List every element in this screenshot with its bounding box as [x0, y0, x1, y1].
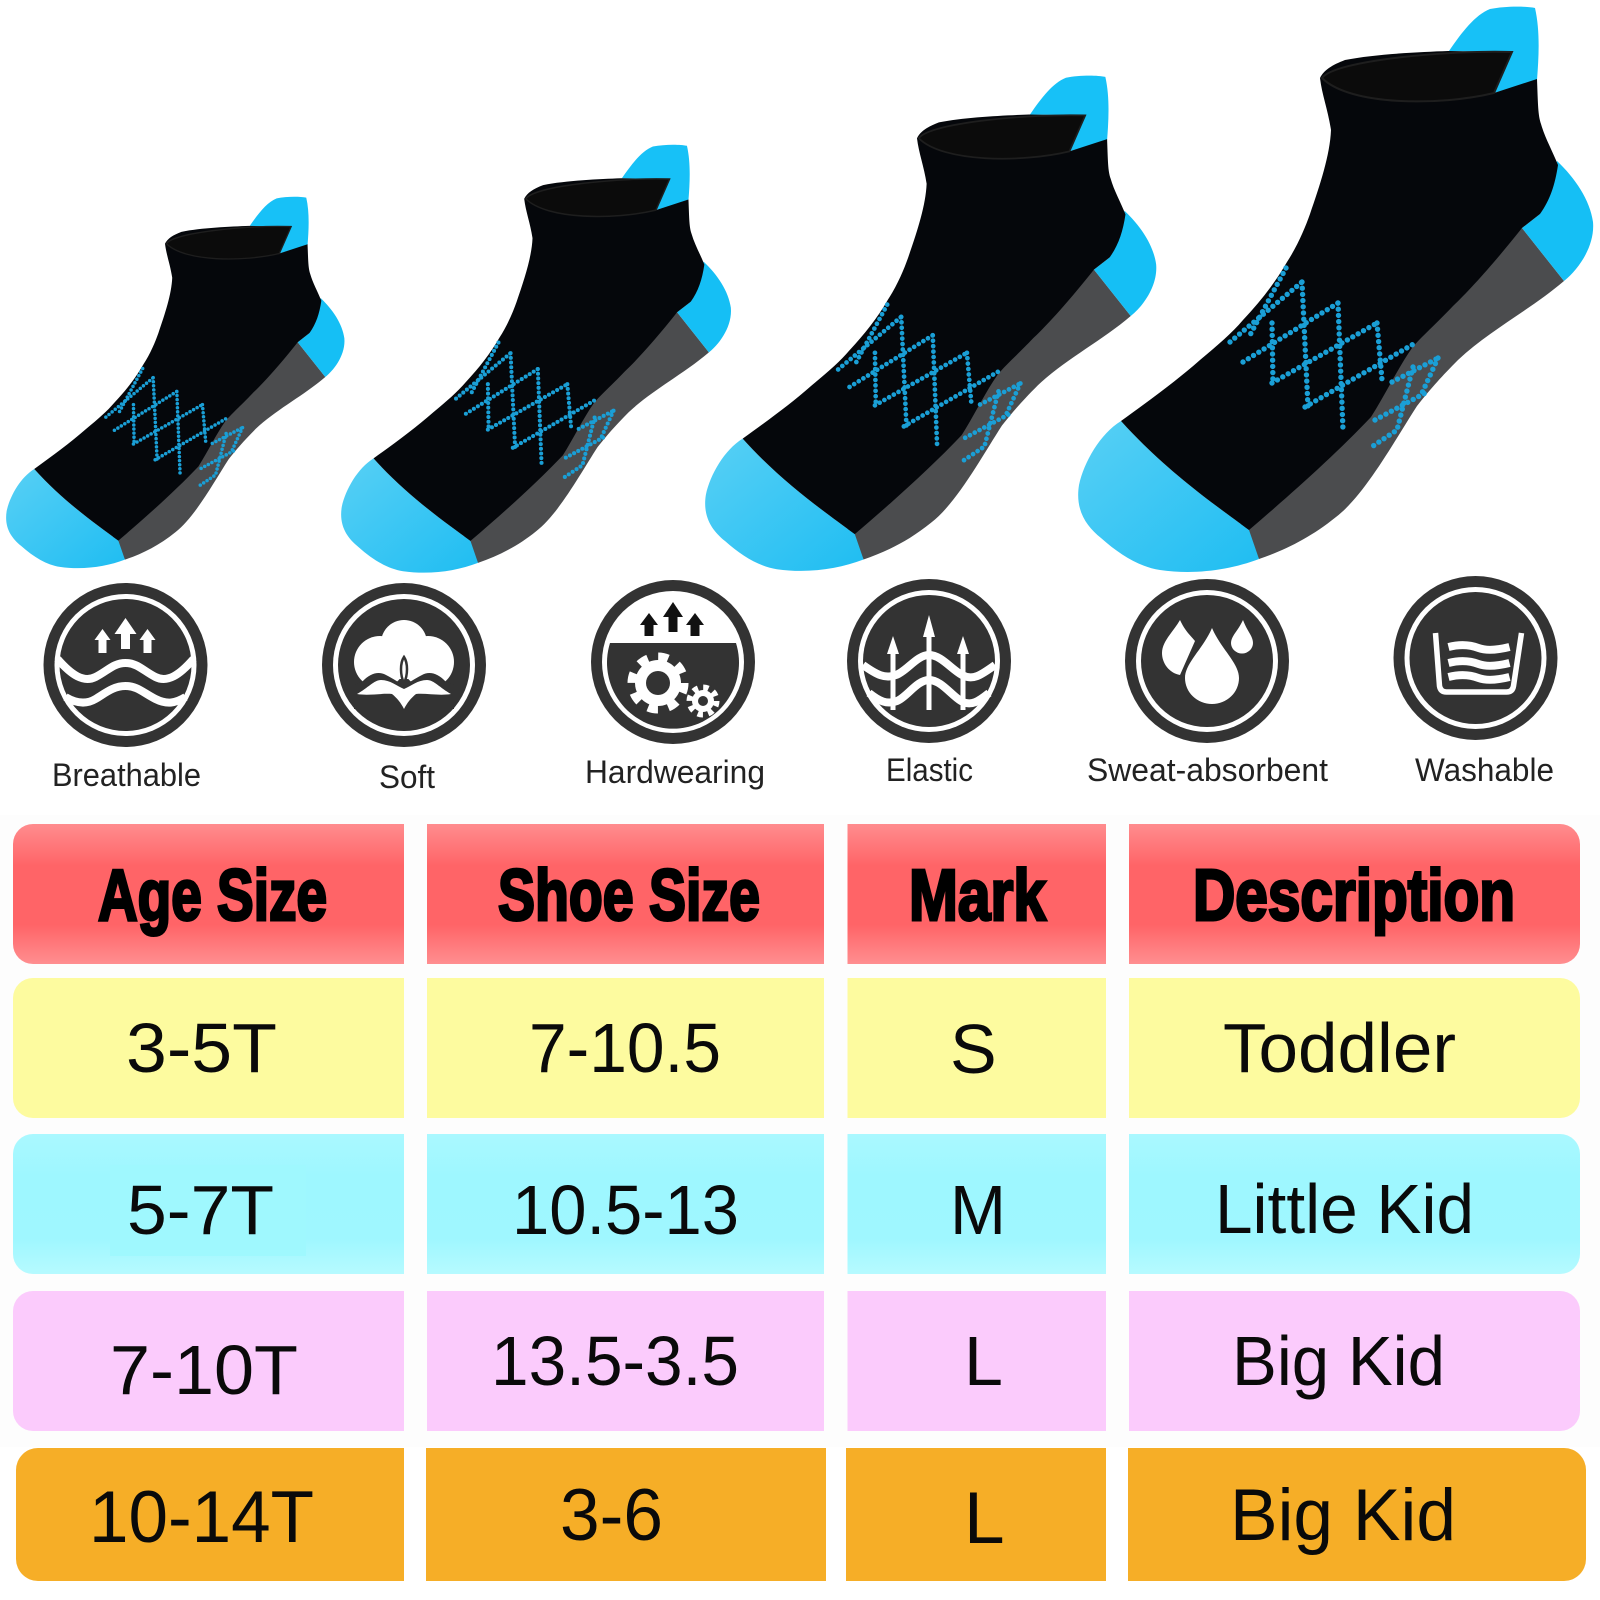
icon: elastic — [847, 579, 1011, 743]
table row: 3-5T toddler — [13, 978, 1580, 1118]
icon: hardwearing gears — [591, 580, 755, 744]
table row: 7-10T big kid: 13.5-3.5 — [491, 1322, 739, 1400]
header cell: Shoe Size — [427, 824, 824, 964]
label: Soft: Soft — [379, 759, 435, 795]
header cell: Shoe Size: Shoe Size — [498, 856, 760, 936]
table row: 3-5T toddler: S — [950, 1010, 997, 1088]
icon: breathable — [44, 583, 208, 747]
icon: sweat absorbent drops — [1125, 579, 1289, 743]
table row: 10-14T big kid: Big Kid — [1230, 1475, 1456, 1556]
table row: 7-10T big kid: Big Kid — [1232, 1322, 1445, 1400]
label: Washable: Washable — [1415, 752, 1554, 788]
sock photo: size S — [6, 197, 344, 568]
header cell: Mark — [848, 824, 1106, 964]
table row: 7-10T big kid: 7-10T — [110, 1331, 298, 1409]
table row: 3-5T toddler: Toddler — [1223, 1009, 1456, 1087]
table row: 5-7T little kid: M — [950, 1171, 1006, 1249]
table backdrop — [0, 815, 1600, 1447]
sock photo: size L — [705, 76, 1156, 571]
table row: 10-14T big kid: 3-6 — [560, 1475, 663, 1556]
table row: 5-7T little kid: 5-7T — [127, 1171, 274, 1249]
table row: 5-7T little kid — [13, 1134, 1580, 1274]
sock photo: size M — [341, 145, 731, 573]
icon: washable tub — [1394, 576, 1558, 740]
header cell: Description: Description — [1193, 856, 1515, 936]
table row: 10-14T big kid: 10-14T — [89, 1477, 314, 1558]
sock photo: size XL — [1078, 7, 1593, 572]
table row: 10-14T big kid: L — [964, 1478, 1005, 1559]
label: Elastic: Elastic — [886, 752, 973, 788]
table row: 3-5T toddler: 3-5T — [126, 1009, 277, 1087]
table header row — [13, 824, 1580, 964]
header cell: Age Size — [13, 824, 404, 964]
label: Sweat-absorbent: Sweat-absorbent — [1087, 752, 1328, 788]
icon: soft cotton — [322, 583, 486, 747]
header cell: Description — [1129, 824, 1580, 964]
label: Hardwearing: Hardwearing — [585, 754, 765, 790]
header cell: Mark: Mark — [909, 856, 1047, 936]
table row: 10-14T big kid — [16, 1448, 1586, 1581]
table row: 7-10T big kid: L — [964, 1322, 1003, 1400]
label: Breathable: Breathable — [52, 757, 201, 793]
table row: 5-7T little kid: Little Kid — [1215, 1170, 1474, 1248]
table row: 7-10T big kid — [13, 1291, 1580, 1431]
header cell: Age Size: Age Size — [98, 856, 327, 936]
table row: 5-7T little kid: 10.5-13 — [512, 1171, 739, 1249]
table row: 3-5T toddler: 7-10.5 — [529, 1009, 721, 1087]
